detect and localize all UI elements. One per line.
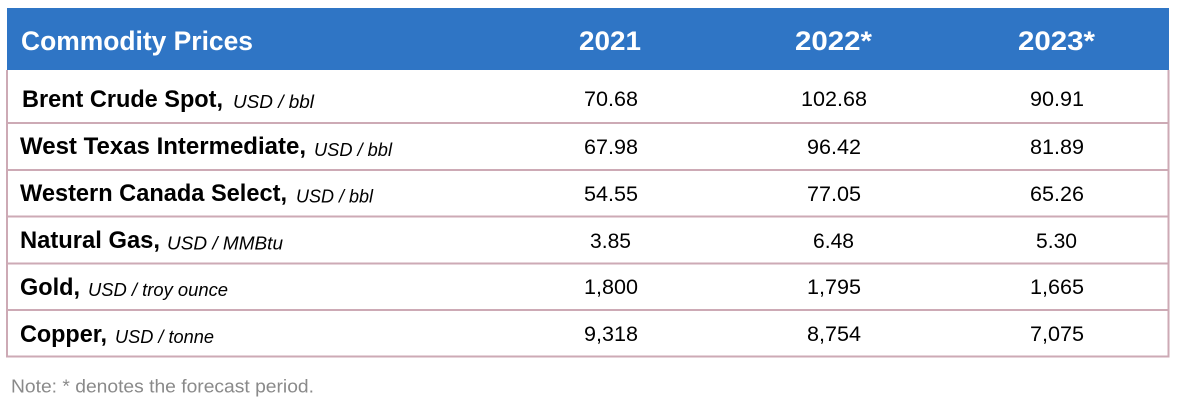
row: west texas intermediate: West Texas Intermediate, [20,133,306,160]
row: western canada select: 65.26 [1030,183,1084,206]
row: brent crude spot: Brent Crude Spot, [22,86,223,113]
row: copper: USD / tonne [115,327,214,347]
table header [7,8,1169,70]
row: brent crude spot [22,86,1084,113]
row: western canada select [20,180,1084,207]
row: gold: 1,665 [1030,276,1084,299]
row: western canada select: 54.55 [584,183,638,206]
row: natural gas: USD / MMBtu [167,234,283,254]
row: natural gas: 6.48 [813,230,854,253]
header: 2023 forecast: 2023* [1018,26,1096,56]
table frame [7,70,1168,356]
row: west texas intermediate: 96.42 [807,136,861,159]
row: brent crude spot: 102.68 [801,88,867,111]
row: gold: 1,795 [807,276,861,299]
row: western canada select: 77.05 [807,183,861,206]
row: gold [20,274,1084,301]
row: natural gas: 5.30 [1036,230,1077,253]
row: copper: 7,075 [1030,323,1084,346]
footnote: Note: * denotes the forecast period. [11,376,314,396]
row: copper [20,321,1084,348]
row: western canada select: Western Canada Select, [20,180,287,207]
row: brent crude spot: USD / bbl [233,92,315,112]
row: natural gas: 3.85 [590,230,631,253]
row: west texas intermediate: 67.98 [584,136,638,159]
header: 2022 forecast: 2022* [795,26,873,56]
row: west texas intermediate: 81.89 [1030,136,1084,159]
row: copper: 8,754 [807,323,861,346]
row: gold: USD / troy ounce [88,280,228,300]
row: west texas intermediate: USD / bbl [314,140,393,160]
row: brent crude spot: 70.68 [584,88,638,111]
row: west texas intermediate [20,133,1084,160]
header: commodity prices: Commodity Prices [21,26,253,56]
row: natural gas [20,227,1077,254]
row: gold: 1,800 [584,276,638,299]
row: copper: 9,318 [584,323,638,346]
row: natural gas: Natural Gas, [20,227,160,254]
row: brent crude spot: 90.91 [1030,88,1084,111]
row: western canada select: USD / bbl [296,186,374,206]
header: 2021: 2021 [579,26,641,56]
row: copper: Copper, [20,321,107,348]
row: gold: Gold, [20,274,80,301]
